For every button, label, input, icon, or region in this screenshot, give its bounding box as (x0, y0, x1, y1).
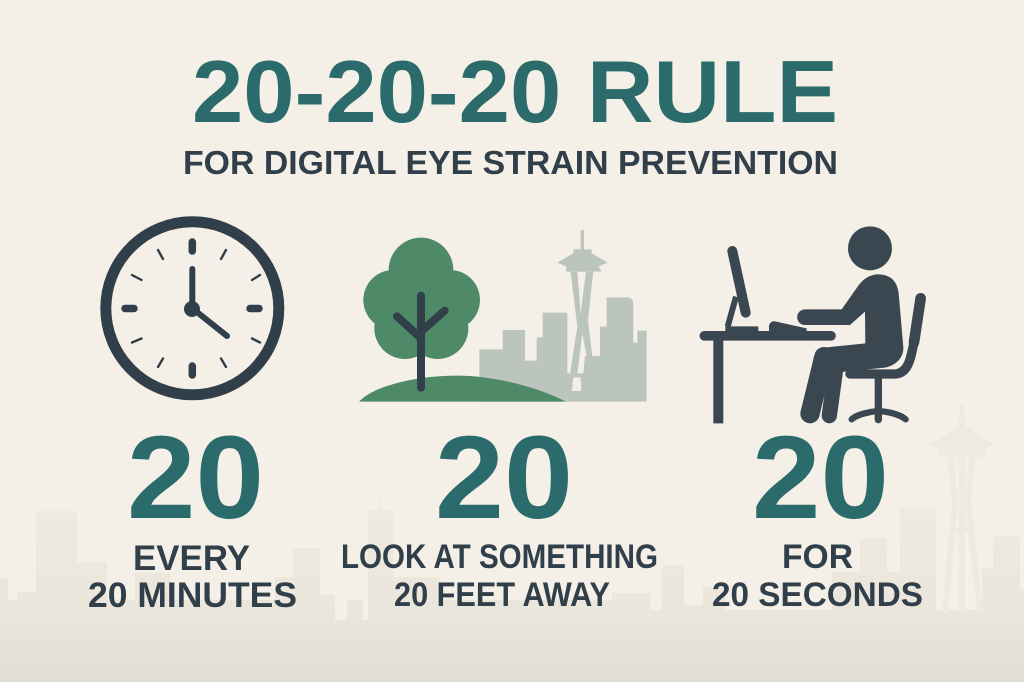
tree trunk and branches (397, 296, 445, 388)
column 2: number: 20 (435, 412, 573, 544)
icon: clock (106, 222, 279, 395)
column 2: label: LOOK AT SOMETHING (341, 538, 658, 576)
desk (699, 331, 836, 423)
column 1: number: 20 (127, 412, 264, 544)
column 1: label: 20 MINUTES (88, 576, 297, 615)
clock hub (184, 301, 200, 317)
column 1: label (88, 539, 297, 615)
icon: tree and city skyline (359, 230, 647, 402)
icon: person at desk (699, 226, 921, 423)
column 3: label (712, 538, 923, 614)
clock hands (192, 269, 227, 336)
column 2: label: 20 FEET AWAY (394, 576, 610, 614)
tree crown (363, 238, 480, 359)
column 2: label (341, 538, 658, 614)
column 1: label: EVERY (133, 539, 250, 578)
head (848, 226, 892, 270)
background buildings (0, 490, 1024, 682)
monitor stand (728, 297, 736, 327)
hill (359, 376, 566, 402)
background space needle (930, 405, 994, 612)
torso and arm (797, 274, 903, 375)
clock ticks (125, 242, 260, 375)
background skyline (0, 405, 1024, 682)
column 3: number: 20 (752, 412, 889, 544)
column 3: label: FOR (782, 538, 853, 576)
subtitle: FOR DIGITAL EYE STRAIN PREVENTION (183, 144, 838, 181)
clock ring (106, 222, 279, 395)
title: 20-20-20 RULE (192, 42, 838, 141)
chair (850, 298, 921, 420)
keyboard (769, 321, 807, 332)
legs (810, 357, 824, 414)
column 3: label: 20 SECONDS (712, 576, 923, 614)
monitor (732, 251, 746, 313)
space needle (557, 230, 608, 402)
city skyline (479, 297, 647, 402)
